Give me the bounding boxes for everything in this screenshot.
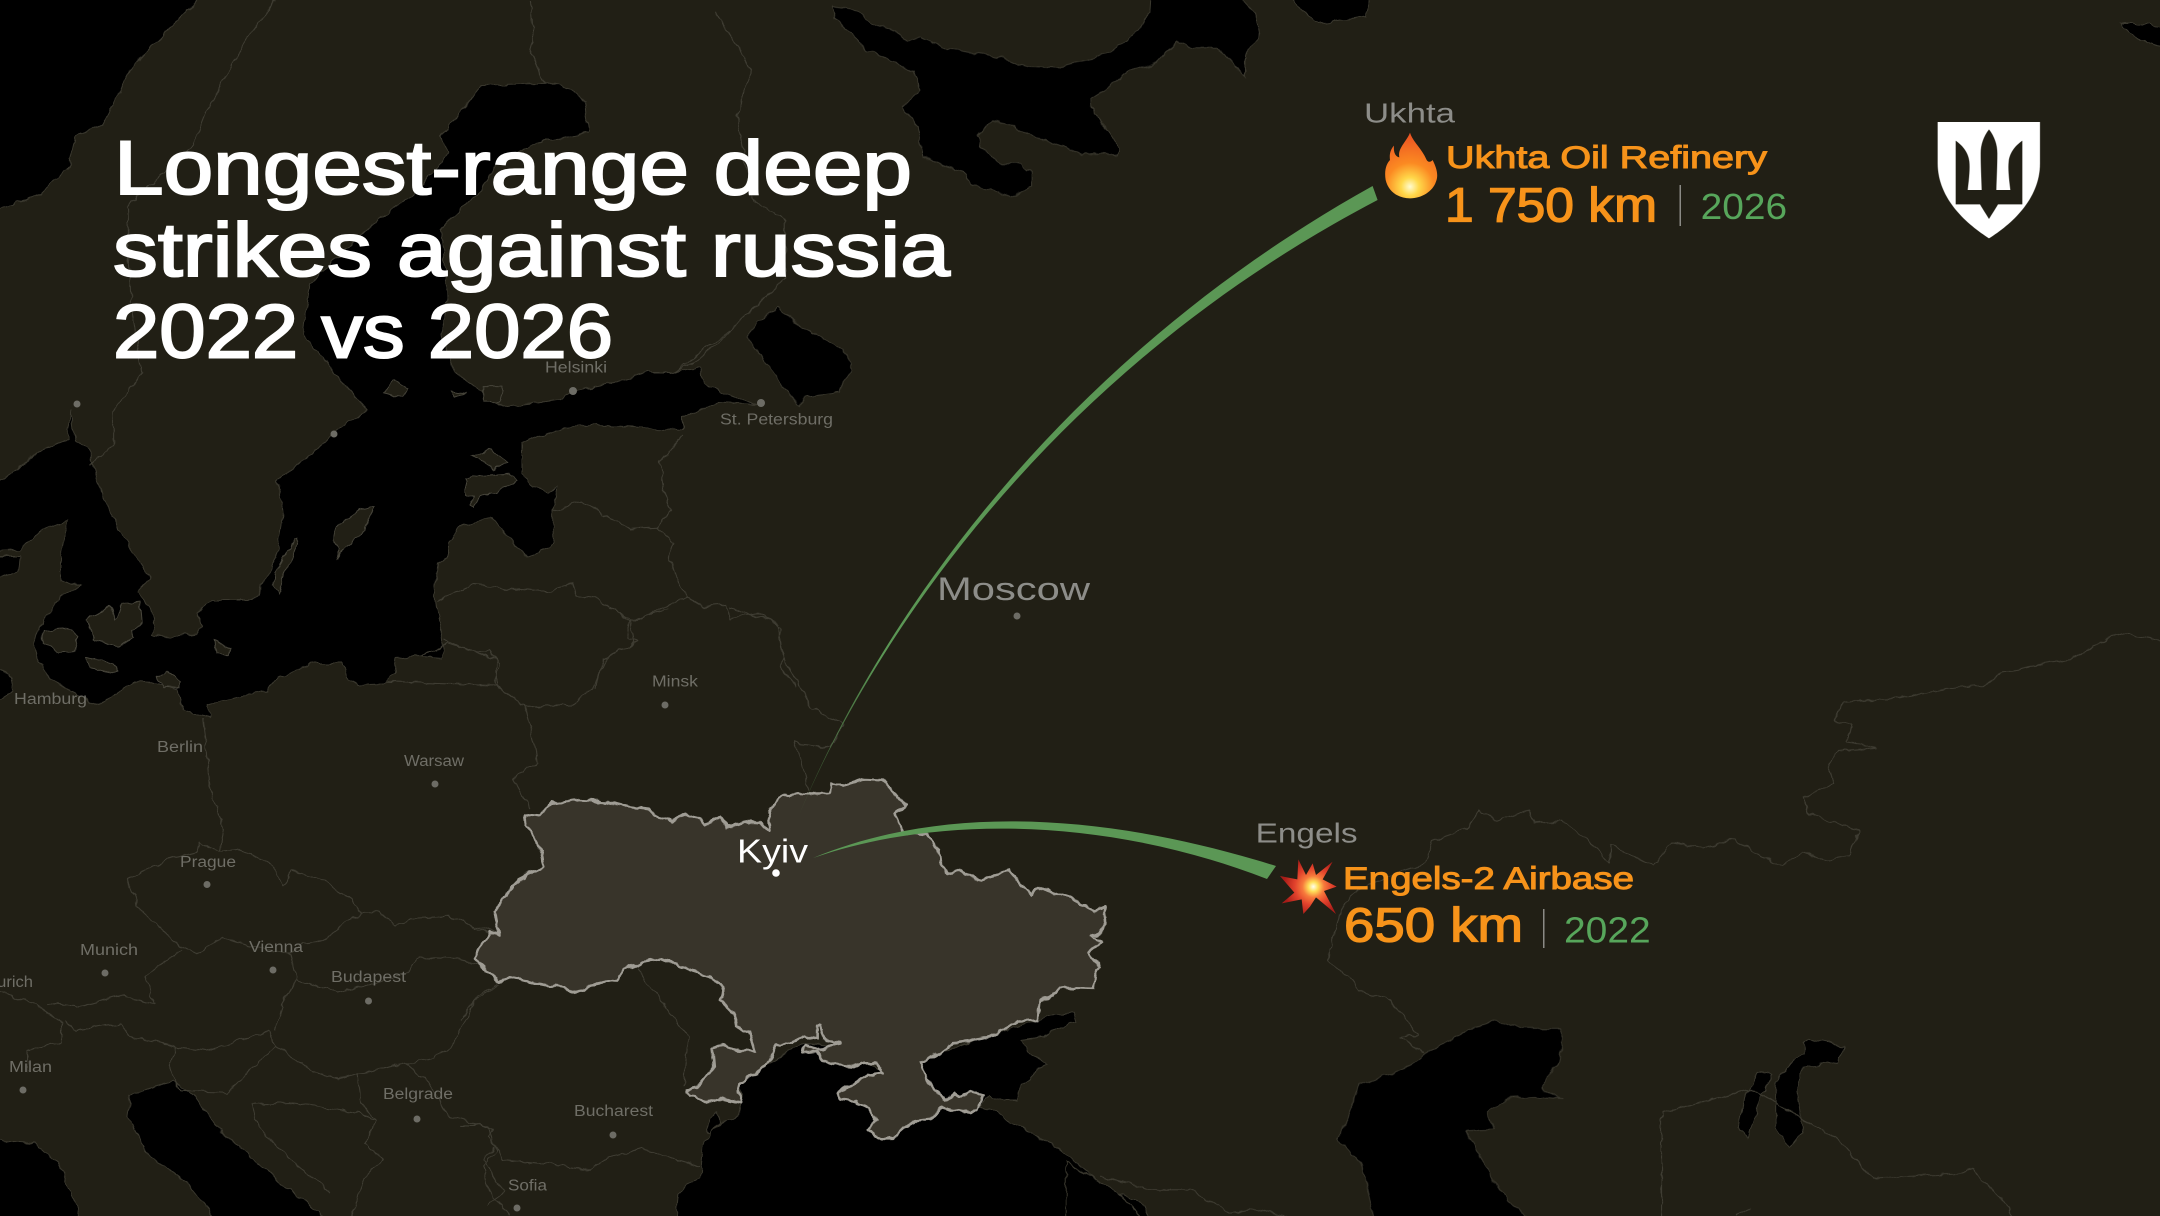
callout: Ukhta Oil Refinery: 1 750 km <box>1445 180 1657 233</box>
city labels: Munich <box>80 942 138 959</box>
title: strikes against russia <box>113 208 951 293</box>
callout: Engels-2 Airbase: 650 km <box>1344 900 1523 953</box>
city labels: Berlin <box>157 739 203 756</box>
callout: Ukhta Oil Refinery: Ukhta Oil Refinery <box>1446 139 1767 175</box>
title: 2022 vs 2026 <box>113 290 613 375</box>
city labels <box>0 360 833 1195</box>
arc: Kyiv to Ukhta, 1 750 km <box>799 186 1378 815</box>
callout: Engels-2 Airbase: 2022 <box>1564 910 1651 951</box>
title <box>113 126 951 375</box>
title: Longest-range deep <box>114 126 912 211</box>
arc: Kyiv to Engels, 650 km <box>813 821 1276 879</box>
icon: armed forces trident shield <box>1938 122 2040 238</box>
city labels: Milan <box>9 1059 52 1076</box>
city labels: Helsinki <box>545 360 607 377</box>
label: Kyiv: Kyiv <box>737 833 809 870</box>
city labels: Hamburg <box>14 691 87 708</box>
islands <box>43 382 517 688</box>
callout: Engels-2 Airbase <box>1343 860 1651 953</box>
city labels: Belgrade <box>383 1086 453 1103</box>
city labels: Warsaw <box>404 753 465 770</box>
map: Ukraine <box>474 780 1107 1138</box>
city labels: Bucharest <box>574 1103 654 1120</box>
callout: Ukhta Oil Refinery: 2026 <box>1701 186 1787 227</box>
city labels: Sofia <box>508 1178 547 1195</box>
city labels: Budapest <box>331 969 407 986</box>
city labels: Vienna <box>249 939 303 956</box>
label: Ukhta: Ukhta <box>1364 98 1456 129</box>
city dots <box>20 387 1020 1212</box>
callout: Ukhta Oil Refinery <box>1445 139 1787 233</box>
city labels: St. Petersburg <box>720 411 833 428</box>
label: Moscow: Moscow <box>937 571 1091 607</box>
label: Engels: Engels <box>1256 817 1358 848</box>
callout: Engels-2 Airbase: Engels-2 Airbase <box>1343 860 1634 896</box>
city labels: Minsk <box>652 674 698 691</box>
icon: fire <box>1385 133 1437 198</box>
city labels: Prague <box>180 854 236 871</box>
icon: explosion <box>1280 859 1337 914</box>
